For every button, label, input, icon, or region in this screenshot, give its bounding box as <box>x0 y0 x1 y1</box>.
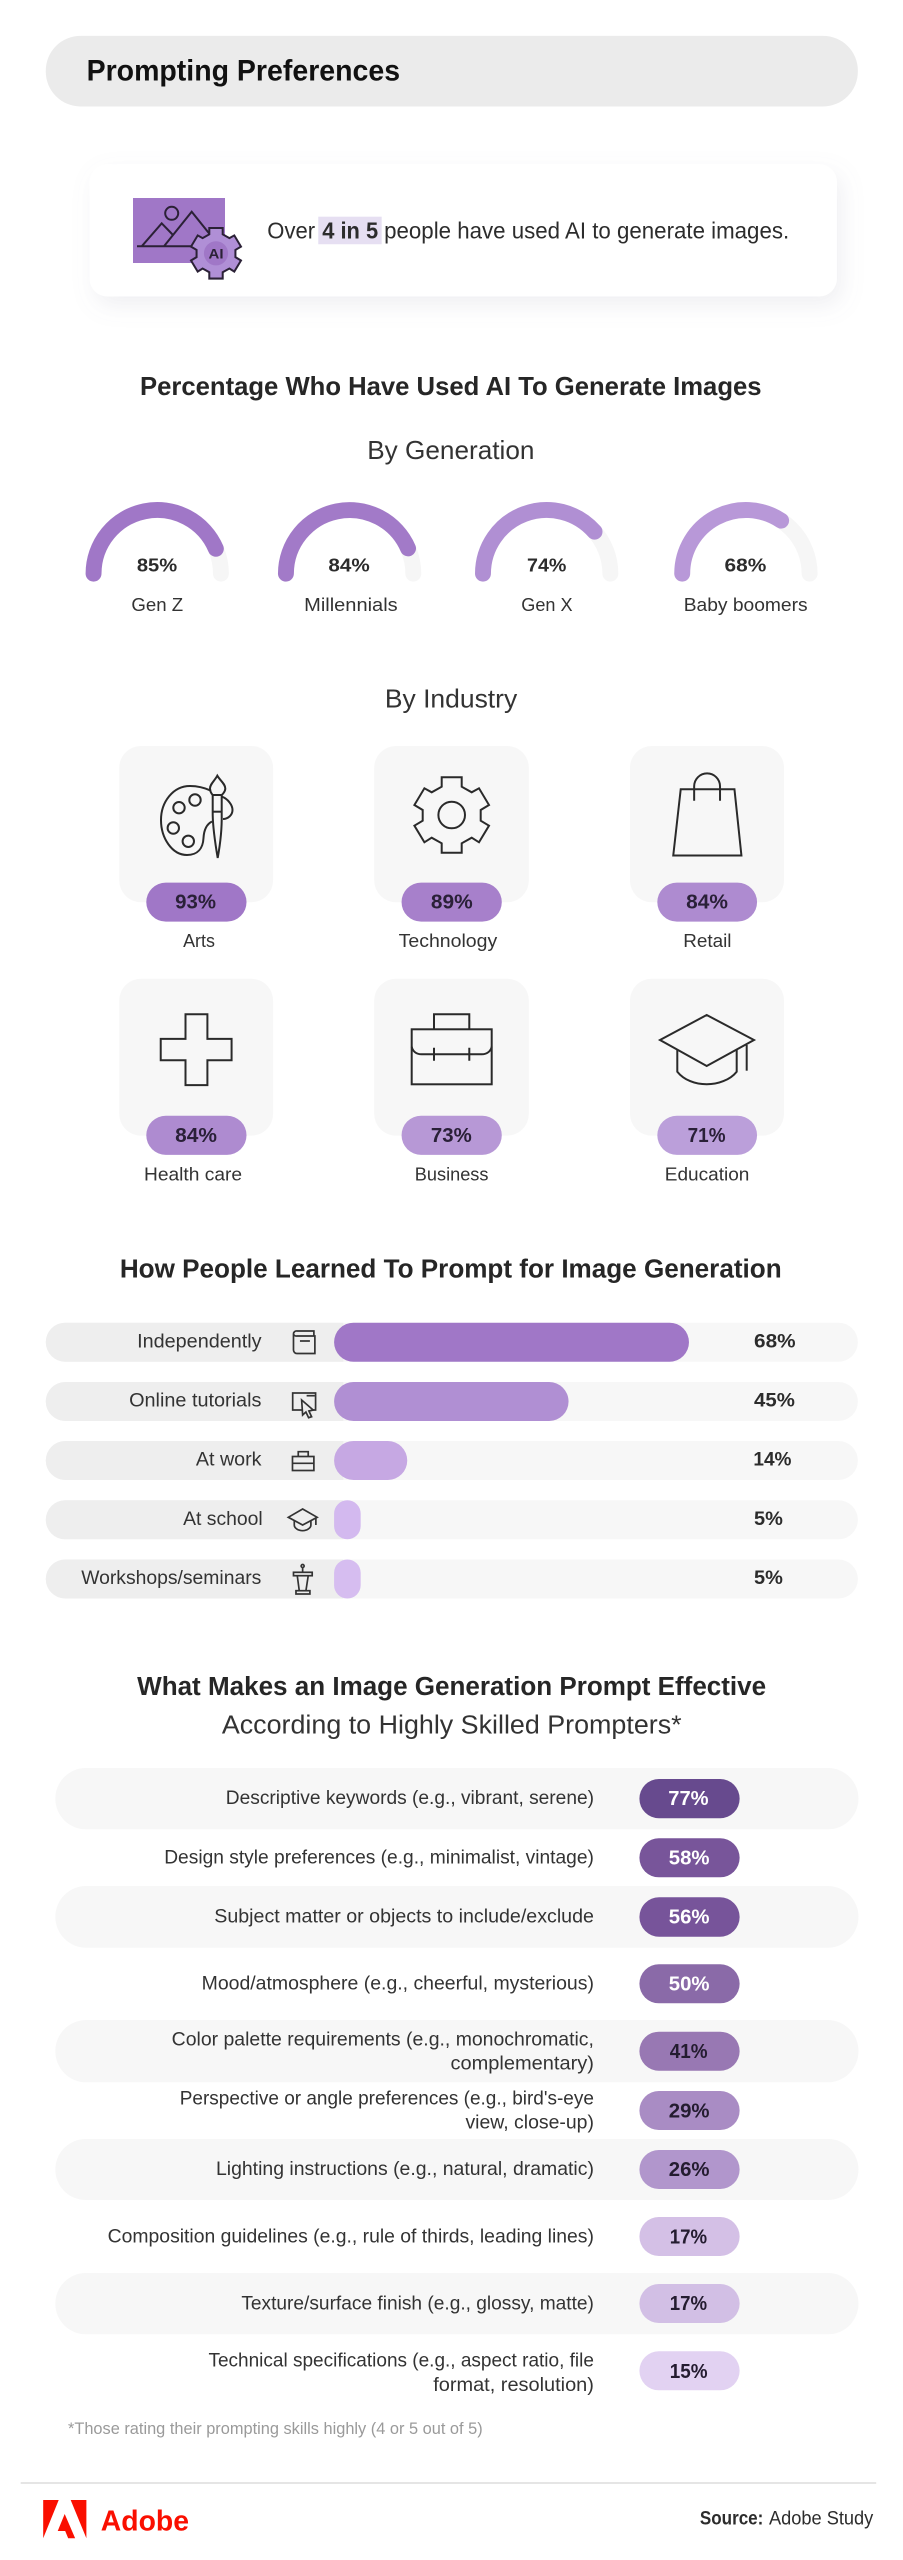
callout: 4 in 5 <box>90 164 837 296</box>
gauge: Baby boomers: 68% <box>725 556 767 577</box>
row: Lighting 26%: Lighting instructions (e.g., natural, dramatic) <box>216 2159 594 2180</box>
row: Subject matter 56% <box>55 1886 858 1948</box>
panel: Health care <box>119 979 273 1185</box>
row: Texture 17% <box>55 2273 858 2334</box>
badge: 84% <box>657 883 757 922</box>
panel: Business: Business <box>415 1164 488 1185</box>
row: Color palette 41% <box>55 2020 858 2082</box>
icon: briefcase <box>412 1014 492 1084</box>
row: Descriptive keywords 77%: Descriptive keywords (e.g., vibrant, serene) <box>226 1788 594 1809</box>
badge: 84% <box>146 1116 247 1155</box>
gauge: Gen X: Gen X <box>521 595 573 616</box>
bar: Independently 68% <box>46 1323 858 1362</box>
gauge: Gen X: 74% <box>527 556 567 577</box>
panel: Technology <box>374 746 529 952</box>
gauge: Gen Z <box>94 510 221 616</box>
row: Mood 50%: Mood/atmosphere (e.g., cheerful, mysterious) <box>202 1974 594 1995</box>
bar: Independently 68%: Independently <box>137 1331 262 1352</box>
row: Descriptive keywords 77%: 77% <box>668 1788 709 1810</box>
row: Lighting 26%: 26% <box>669 2159 710 2181</box>
source: Source: <box>700 2507 763 2529</box>
row: Technical 15% <box>208 2351 740 2396</box>
source <box>700 2507 874 2529</box>
bar: At school 5% <box>46 1500 858 1539</box>
bar: At school 5%: At school <box>183 1509 263 1530</box>
bar: Online tutorials 45% <box>46 1382 858 1421</box>
row: Design style 58% <box>164 1838 740 1877</box>
row: Technical 15%: format, resolution) <box>433 2375 594 2396</box>
row: Composition 17%: 17% <box>670 2226 707 2249</box>
callout text: 4 in 5 <box>322 217 378 243</box>
badge: 89%: 89% <box>431 892 473 914</box>
bar: Workshops/seminars 5%: Workshops/seminars <box>81 1568 261 1589</box>
row: Perspective 29%: Perspective or angle preferences (e.g., bird's-eye <box>180 2089 594 2110</box>
row: Subject matter 56%: 56% <box>669 1907 710 1929</box>
logo: Adobe: Adobe <box>101 2506 189 2538</box>
title <box>46 36 858 106</box>
panel: Education: Education <box>665 1164 749 1185</box>
panel: Health care: Health care <box>144 1164 242 1185</box>
gauge: Baby boomers: Baby boomers <box>684 595 808 616</box>
row: Color palette 41%: 41% <box>670 2041 708 2063</box>
title: Prompting Preferences <box>87 55 400 88</box>
icon: gear <box>414 777 489 853</box>
row: Mood 50% <box>202 1964 740 2003</box>
badge: 73% <box>402 1116 502 1155</box>
panel: Retail <box>630 746 784 952</box>
badge: 84%: 84% <box>175 1125 217 1147</box>
row: Texture 17%: 17% <box>670 2293 707 2315</box>
callout text: Over <box>267 217 315 243</box>
gauge: Millennials <box>286 510 413 616</box>
row: Perspective 29%: 29% <box>669 2100 710 2123</box>
panel: Business <box>374 979 529 1185</box>
icon: AI image: AI <box>208 246 223 262</box>
badge: 93%: 93% <box>175 892 216 914</box>
heading: percentage: Percentage Who Have Used AI To Generate Images <box>140 373 762 401</box>
icon: palette <box>161 776 232 858</box>
badge: 71%: 71% <box>688 1125 726 1147</box>
bar: At work 14% <box>46 1441 858 1480</box>
icon: shopping bag <box>673 773 741 855</box>
panel: Education <box>630 979 784 1185</box>
row: Color palette 41%: Color palette requirements (e.g., monochromatic, <box>172 2030 594 2051</box>
badge: 89% <box>402 883 502 922</box>
footnote: *Those rating their prompting skills highly (4 or 5 out of 5) <box>68 2419 483 2438</box>
bar: Workshops/seminars 5%: 5% <box>754 1568 783 1589</box>
bar: Independently 68%: 68% <box>754 1331 796 1352</box>
bar: At school 5%: 5% <box>754 1509 783 1530</box>
bar: Workshops/seminars 5% <box>46 1560 858 1598</box>
panel: Technology: Technology <box>399 931 498 952</box>
row: Composition 17% <box>108 2217 740 2256</box>
row: Mood 50%: 50% <box>669 1973 710 1996</box>
row: Perspective 29% <box>180 2089 740 2133</box>
badge: 73%: 73% <box>431 1125 472 1147</box>
row: Color palette 41%: complementary) <box>451 2053 594 2074</box>
subheading: by industry: By Industry <box>385 685 517 713</box>
gauge: Millennials: Millennials <box>304 595 398 616</box>
panel: Arts <box>119 746 273 952</box>
bar: Online tutorials 45%: 45% <box>754 1391 795 1412</box>
badge: 84%: 84% <box>686 892 728 914</box>
bar: Online tutorials 45%: Online tutorials <box>129 1391 261 1412</box>
icon: AI image <box>133 198 241 279</box>
gauge: Gen Z: Gen Z <box>131 595 183 616</box>
row: Design style 58%: 58% <box>669 1847 710 1870</box>
bar: At work 14%: 14% <box>753 1450 792 1471</box>
callout text: people have used AI to generate images. <box>384 217 789 243</box>
subheading: by generation: By Generation <box>367 437 534 465</box>
row: Descriptive keywords 77% <box>55 1768 858 1829</box>
bar chart: how people learned <box>46 1323 858 1598</box>
subheading: according to skilled prompters: According to Highly Skilled Prompters* <box>222 1711 682 1739</box>
source: Adobe Study <box>769 2507 874 2529</box>
heading: what makes a prompt effective: What Makes an Image Generation Prompt Effective <box>137 1673 766 1701</box>
bar: At work 14%: At work <box>196 1450 262 1471</box>
row: Composition 17%: Composition guidelines (e.g., rule of thirds, leading lines) <box>108 2226 594 2247</box>
panel: Retail: Retail <box>683 931 731 952</box>
row: Design style 58%: Design style preferences (e.g., minimalist, vintage) <box>164 1847 594 1868</box>
badge: 71% <box>657 1116 757 1155</box>
gauge: Gen Z: 85% <box>137 556 177 577</box>
panel: Arts: Arts <box>183 931 215 952</box>
logo: Adobe <box>43 2500 189 2538</box>
chart: effective prompt factors <box>55 1768 858 2396</box>
icon: cross <box>161 1014 232 1085</box>
row: Technical 15%: 15% <box>670 2361 708 2383</box>
row: Technical 15%: Technical specifications (e.g., aspect ratio, file <box>208 2351 594 2372</box>
heading: how people learned: How People Learned To Prompt for Image Generation <box>120 1256 782 1284</box>
gauge: Gen X <box>483 510 610 616</box>
row: Subject matter 56%: Subject matter or objects to include/exclude <box>214 1907 594 1928</box>
row: Perspective 29%: view, close-up) <box>465 2112 594 2133</box>
gauge: Baby boomers <box>682 510 810 616</box>
badge: 93% <box>146 883 247 922</box>
gauge: Millennials: 84% <box>328 556 370 577</box>
icon: graduation cap <box>660 1015 754 1084</box>
row: Texture 17%: Texture/surface finish (e.g., glossy, matte) <box>241 2293 594 2314</box>
row: Lighting 26% <box>55 2139 858 2200</box>
